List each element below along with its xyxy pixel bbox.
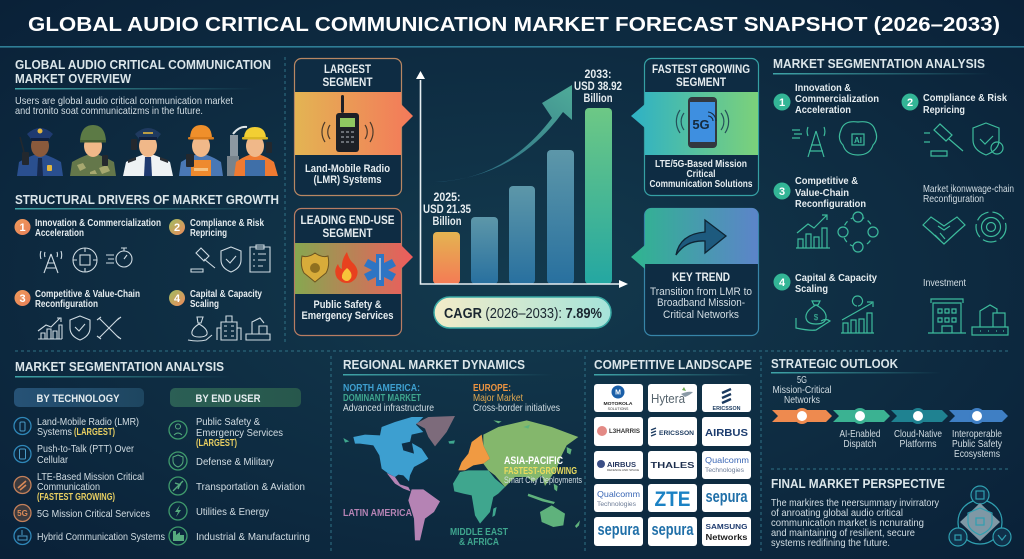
panel: market overview xyxy=(15,57,278,176)
logo: Airbus Defence and Space: DEFENCE AND SPACE xyxy=(607,468,639,472)
driver 4: Capital & Capacity xyxy=(190,289,262,300)
icon: tools xyxy=(97,317,121,339)
driver 1: Innovation & Commercialization xyxy=(35,218,161,229)
panel: competitive landscape xyxy=(594,358,752,546)
Europe xyxy=(458,435,490,470)
label: Public Safety & xyxy=(314,299,382,311)
label: Asia-Pacific: Smart City Deployments xyxy=(504,475,582,486)
logo: Airbus xyxy=(702,417,751,446)
icon: money bag xyxy=(796,301,830,330)
heading: FASTEST GROWING xyxy=(652,64,750,76)
icon: shield check xyxy=(973,123,1003,155)
logo: Sepura xyxy=(702,484,751,512)
logo: Sepura: sepura xyxy=(652,520,694,539)
logo: Ericsson: ERICSSON xyxy=(659,430,694,437)
panel: market segmentation analysis (right) xyxy=(773,56,1014,335)
label: Asia-Pacific: ASIA-PACIFIC xyxy=(504,455,563,467)
item: LMR: Land-Mobile Radio (LMR) xyxy=(37,416,139,428)
label: 2033 value: Billion xyxy=(584,93,612,105)
item: market reconfiguration: Reconfiguration xyxy=(923,193,984,205)
panel: structural drivers xyxy=(14,192,280,341)
overview text: and tronito soat communicatizms in the future. xyxy=(15,105,203,117)
logo: Thales xyxy=(648,451,697,479)
item 3: Value-Chain xyxy=(795,187,849,199)
item: PTT: Push-to-Talk (PTT) Over xyxy=(37,443,134,455)
item: public safety: Public Safety & xyxy=(196,416,260,428)
icon: shield xyxy=(70,316,90,340)
item: PTT xyxy=(14,443,134,466)
item: investment xyxy=(923,277,1008,335)
icon: growth chart xyxy=(38,318,62,339)
icon: industrial worker xyxy=(227,127,278,176)
label: cloud-native: Cloud-Native xyxy=(894,428,942,440)
item: public safety: Emergency Services xyxy=(196,427,283,439)
colour band with pointer xyxy=(295,243,413,294)
label: 5G networks: Networks xyxy=(784,394,820,406)
item: 5G: 5G Mission Critical Services xyxy=(37,508,150,520)
logo: Qualcomm Technologies: Qualcomm xyxy=(597,489,640,499)
heading: SEGMENT xyxy=(676,77,726,89)
label: Europe: Major Market xyxy=(473,392,523,404)
panel: final market perspective xyxy=(771,476,1011,549)
item 2: Repricing xyxy=(923,104,965,116)
logo: Samsung Networks: Networks xyxy=(706,532,748,542)
icon: robot arm xyxy=(972,305,1008,335)
heading: overview xyxy=(15,57,271,90)
driver 4: 4 xyxy=(174,293,181,305)
label: interoperable xyxy=(952,428,1003,460)
icon: AI chip xyxy=(73,248,97,272)
heading: overview: GLOBAL AUDIO CRITICAL COMMUNICATION xyxy=(15,57,271,72)
item 2: 2 xyxy=(907,97,913,109)
icon: flame xyxy=(335,252,358,283)
item 1: Commercialization xyxy=(795,93,879,105)
label: Middle East and Africa xyxy=(450,526,508,548)
item: LMR: Systems xyxy=(37,426,72,438)
Asia xyxy=(483,420,578,487)
heading: SEGMENT xyxy=(322,228,372,240)
item 1: AI xyxy=(854,136,862,145)
label: 5G networks xyxy=(772,374,832,406)
item: public safety: (LARGEST) xyxy=(196,438,237,449)
label: North America: NORTH AMERICA: xyxy=(343,382,420,394)
item: LTE: LTE-Based Mission Critical xyxy=(37,471,144,483)
item: LTE: Communication xyxy=(37,481,100,493)
label: 2033 value: USD 38.92 xyxy=(574,81,622,93)
item: industrial: Industrial & Manufacturing xyxy=(196,531,310,543)
label: 2025 value: Billion xyxy=(432,216,462,228)
logo: Sepura: sepura xyxy=(706,487,748,506)
driver 2: 2 xyxy=(174,222,180,234)
logo: Hytera: Hytera xyxy=(651,391,686,406)
label: interoperable: Interoperable xyxy=(952,428,1002,440)
label: 5G networks: 5G xyxy=(797,374,807,386)
label: 2033 value xyxy=(574,69,622,105)
logo: Motorola Solutions: M xyxy=(615,390,621,396)
driver 3: 3 xyxy=(19,293,26,305)
logo: Motorola Solutions: MOTOROLA xyxy=(604,401,633,406)
overview text xyxy=(15,95,233,117)
heading: LEADING END-USE xyxy=(300,215,395,227)
icons: five responders xyxy=(17,125,278,176)
overview text: Users are global audio critical communication market xyxy=(15,95,233,107)
heading xyxy=(300,215,395,240)
label: AI dispatch: AI-Enabled xyxy=(840,428,881,440)
item: defense: Defense & Military xyxy=(196,456,275,468)
icon: police officer xyxy=(17,128,63,176)
driver 1: 1 xyxy=(19,222,26,234)
label: 2025 value: 2025: xyxy=(434,192,460,204)
icon: utility worker xyxy=(179,125,223,176)
logo: Airbus: AIRBUS xyxy=(705,427,748,439)
icon: gavel xyxy=(924,124,963,156)
growth arrow xyxy=(435,85,572,182)
label xyxy=(302,299,394,322)
text block: communication market is ncnurating xyxy=(771,517,924,529)
heading: LARGEST xyxy=(324,64,371,76)
label: 2025 value xyxy=(423,192,472,228)
logo: Motorola Solutions xyxy=(594,384,643,412)
panel: largest segment xyxy=(294,58,413,196)
label: Europe: Cross-border initiatives xyxy=(473,402,560,414)
driver 2 xyxy=(169,218,270,272)
label: cloud-native xyxy=(894,428,942,450)
icon: building xyxy=(217,316,241,340)
driver 2: Compliance & Risk xyxy=(190,218,264,229)
item: hybrid xyxy=(14,528,165,544)
logo: Sepura xyxy=(594,517,643,546)
icon: gavel xyxy=(191,248,215,272)
label: AI dispatch xyxy=(840,428,881,450)
text block: The markires the neersummary invirratory xyxy=(771,497,940,509)
logo: Ericsson xyxy=(702,384,751,412)
logo: Sepura xyxy=(648,517,697,546)
map: americas xyxy=(343,416,455,540)
bar: year 4 xyxy=(547,150,574,284)
label: interoperable: Public Safety xyxy=(952,438,1003,450)
driver 1 xyxy=(14,218,161,273)
item 3 xyxy=(774,175,878,252)
driver 2: Repricing xyxy=(190,228,227,239)
label: 2033 value: 2033: xyxy=(584,69,612,81)
title: GLOBAL AUDIO CRITICAL COMMUNICATION MARKET FORECAST SNAPSHOT (2026–2033) xyxy=(28,13,1000,36)
item 4: $ xyxy=(814,313,819,322)
label xyxy=(305,163,390,186)
item 1: 1 xyxy=(779,97,785,109)
logo: ZTE xyxy=(648,484,697,512)
icon: handshake xyxy=(923,217,965,244)
label: North America: DOMINANT MARKET xyxy=(343,392,421,404)
Australia xyxy=(540,505,565,527)
label: North America xyxy=(343,382,434,414)
panel: leading end-use segment xyxy=(294,208,413,336)
text block: of anroating global audio critical xyxy=(771,507,903,519)
item: 5G: 5G xyxy=(17,509,28,518)
item: hybrid: Hybrid Communication Systems xyxy=(37,531,165,543)
Asian islands xyxy=(493,420,572,504)
heading: REGIONAL MARKET DYNAMICS xyxy=(343,357,525,372)
icon: investment chart xyxy=(841,296,874,333)
item 4: Scaling xyxy=(795,283,828,295)
label: Middle East and Africa: & AFRICA xyxy=(459,536,499,548)
label: Europe xyxy=(473,382,560,414)
text block xyxy=(771,497,940,549)
logo: L3Harris xyxy=(594,417,643,446)
icon: 5G phone: 5G xyxy=(692,117,710,132)
label xyxy=(650,158,753,190)
logo: Airbus Defence and Space xyxy=(594,451,643,479)
item: PTT: Cellular xyxy=(37,454,68,466)
label: interoperable: Ecosystems xyxy=(954,448,1000,460)
item: LMR: (LARGEST) xyxy=(74,427,115,438)
logo: Ericsson xyxy=(648,417,697,446)
label: KEY TREND xyxy=(672,270,730,284)
logo: Qualcomm Technologies: Technologies xyxy=(597,501,637,508)
icon: star of life xyxy=(364,254,396,286)
icon: AI brain xyxy=(839,122,877,155)
icon: police badge xyxy=(301,253,329,282)
colour band with pointer xyxy=(631,92,758,155)
item 3: Competitive & xyxy=(795,175,858,187)
pill: by end user: BY END USER xyxy=(196,393,261,405)
Hawaii and Iceland xyxy=(343,438,455,444)
item 4: Capital & Capacity xyxy=(795,272,877,284)
label: 2025 value: USD 21.35 xyxy=(423,204,472,216)
South America xyxy=(408,489,440,540)
label: 5G networks: Mission-Critical xyxy=(772,384,832,396)
Greenland xyxy=(416,416,455,446)
axes xyxy=(416,71,628,288)
bar: year 3 xyxy=(509,186,535,284)
logo: ZTE: ZTE xyxy=(654,488,690,511)
item 2: Compliance & Risk xyxy=(923,92,1007,104)
heading: COMPETITIVE LANDSCAPE xyxy=(594,358,752,372)
map: Europe, Africa, Asia and Oceania xyxy=(453,420,580,528)
driver 3: Competitive & Value-Chain xyxy=(35,289,140,300)
label: Asia-Pacific: FASTEST-GROWING xyxy=(504,466,577,477)
logo: Qualcomm Technologies xyxy=(594,484,643,512)
item 1: Acceleration xyxy=(795,104,851,116)
item: transportation xyxy=(169,477,305,495)
logo: Samsung Networks: SAMSUNG xyxy=(706,524,748,531)
heading xyxy=(322,64,372,89)
item: utilities xyxy=(169,502,270,520)
Madagascar xyxy=(492,507,497,517)
pill: by end user xyxy=(170,388,301,407)
icon: robot line xyxy=(246,318,270,340)
pill: by technology: BY TECHNOLOGY xyxy=(36,393,120,405)
logo: Qualcomm Technologies: Technologies xyxy=(705,467,745,474)
icon: value-chain cycle xyxy=(838,212,878,252)
item: market reconfiguration xyxy=(923,183,1014,244)
icon: curved arrow xyxy=(676,220,726,255)
list: by technology xyxy=(14,416,165,544)
text block: and maintaining of resilient, secure xyxy=(771,527,915,539)
item 2 xyxy=(902,92,1007,156)
item 3: Reconfiguration xyxy=(795,198,866,210)
item 4 xyxy=(774,272,877,333)
label: Communication Solutions xyxy=(650,178,753,190)
icon: handheld radio xyxy=(322,95,373,152)
driver 3: Reconfiguration xyxy=(35,299,98,310)
label: Latin America: LATIN AMERICA xyxy=(343,507,412,519)
item: LTE: (FASTEST GROWING) xyxy=(37,492,115,503)
heading: FINAL MARKET PERSPECTIVE xyxy=(771,476,945,491)
Africa and Middle East xyxy=(453,470,505,524)
item: LTE xyxy=(14,471,144,503)
label: Europe: EUROPE: xyxy=(473,382,511,394)
logo: Qualcomm Technologies: Qualcomm xyxy=(705,455,749,465)
label: Critical Networks xyxy=(663,309,739,321)
icon: secure network xyxy=(949,486,1011,546)
text block: systems redifining the future. xyxy=(771,537,890,549)
label: Transition from LMR to xyxy=(650,286,752,298)
timeline chevrons xyxy=(772,408,1008,424)
label: Asia-Pacific xyxy=(504,455,582,486)
label xyxy=(650,270,752,321)
icon: growth chart xyxy=(796,215,830,248)
label: Broadband Mission- xyxy=(657,297,745,309)
logo: Sepura: sepura xyxy=(598,520,640,539)
icon: stopwatch xyxy=(106,248,132,267)
item: LMR xyxy=(14,416,139,438)
Central America xyxy=(387,473,411,491)
logo: Motorola Solutions: SOLUTIONS xyxy=(608,407,629,411)
logo: Ericsson: ERICSSON xyxy=(712,406,741,412)
item: industrial xyxy=(169,527,310,545)
logo: Thales: THALES xyxy=(650,461,695,470)
New Zealand xyxy=(575,520,580,528)
icon: gear xyxy=(976,212,1006,242)
North America xyxy=(353,417,428,481)
label: AI dispatch: Dispatch xyxy=(844,438,877,450)
heading: overview: MARKET OVERVIEW xyxy=(15,71,132,86)
callout: CAGR: CAGR (2026–2033): 7.89% xyxy=(444,306,602,322)
bar: 2033 xyxy=(585,108,612,284)
pill: by technology xyxy=(14,388,144,407)
heading: MARKET SEGMENTATION ANALYSIS xyxy=(15,359,224,374)
heading: structural drivers: STRUCTURAL DRIVERS OF MARKET GROWTH xyxy=(15,192,279,207)
label: North America: Advanced infrastructure xyxy=(343,402,434,414)
item: public safety xyxy=(169,416,283,449)
panel: key trend xyxy=(631,208,758,336)
panel: market segmentation by technology and end user xyxy=(14,359,310,545)
item: investment: Investment xyxy=(923,277,966,289)
heading: SEGMENT xyxy=(322,77,372,89)
label: Middle East and Africa: MIDDLE EAST xyxy=(450,526,508,538)
label: cloud-native: Platforms xyxy=(900,438,936,450)
item 3: 3 xyxy=(779,186,785,198)
item 4: 4 xyxy=(779,277,786,289)
callout: CAGR xyxy=(434,297,611,328)
panel: fastest growing segment xyxy=(631,58,758,196)
driver 4 xyxy=(169,289,270,341)
icon: shield xyxy=(221,247,241,272)
logo: Qualcomm Technologies xyxy=(702,451,751,479)
driver 1: Acceleration xyxy=(35,228,84,239)
heading xyxy=(652,64,750,89)
panel: regional market dynamics xyxy=(343,357,582,548)
icon: checklist xyxy=(250,245,270,272)
label: Emergency Services xyxy=(302,310,394,322)
item: 5G xyxy=(14,504,150,522)
label: LTE/5G-Based Mission xyxy=(655,158,747,170)
icon: money bag xyxy=(188,317,212,341)
icon: soldier xyxy=(70,125,116,176)
panel: strategic outlook xyxy=(771,357,1008,460)
item 1: Innovation & xyxy=(795,82,851,94)
Hudson Bay xyxy=(402,441,414,454)
icon: tower xyxy=(40,251,62,273)
driver 4: Scaling xyxy=(190,299,219,310)
label: Land-Mobile Radio xyxy=(305,163,390,175)
heading: MARKET SEGMENTATION ANALYSIS xyxy=(773,56,985,71)
item 1 xyxy=(774,82,879,157)
list: by end user xyxy=(169,416,310,545)
colour band with pointer xyxy=(295,92,413,155)
logo: Samsung Networks xyxy=(702,517,751,546)
bar chart: market size 2025 to 2033 xyxy=(416,69,628,288)
item: defense xyxy=(169,452,275,470)
logo: Hytera xyxy=(648,384,697,412)
colour band with pointer xyxy=(631,208,758,269)
logo: Airbus Defence and Space: AIRBUS xyxy=(607,462,636,469)
heading: STRATEGIC OUTLOOK xyxy=(771,357,898,371)
item: transportation: Transportation & Aviation xyxy=(196,481,305,493)
label: Critical xyxy=(686,168,716,180)
icon: pilot xyxy=(123,128,173,176)
item: utilities: Utilities & Energy xyxy=(196,506,270,518)
icon: office building xyxy=(928,299,966,333)
logo: L3Harris: L3HARRIS xyxy=(609,428,641,435)
bar: 2025 xyxy=(433,232,460,284)
icon: signal tower xyxy=(792,127,825,157)
bar: year 2 xyxy=(471,217,498,284)
label: (LMR) Systems xyxy=(314,174,382,186)
driver 3 xyxy=(14,289,140,340)
